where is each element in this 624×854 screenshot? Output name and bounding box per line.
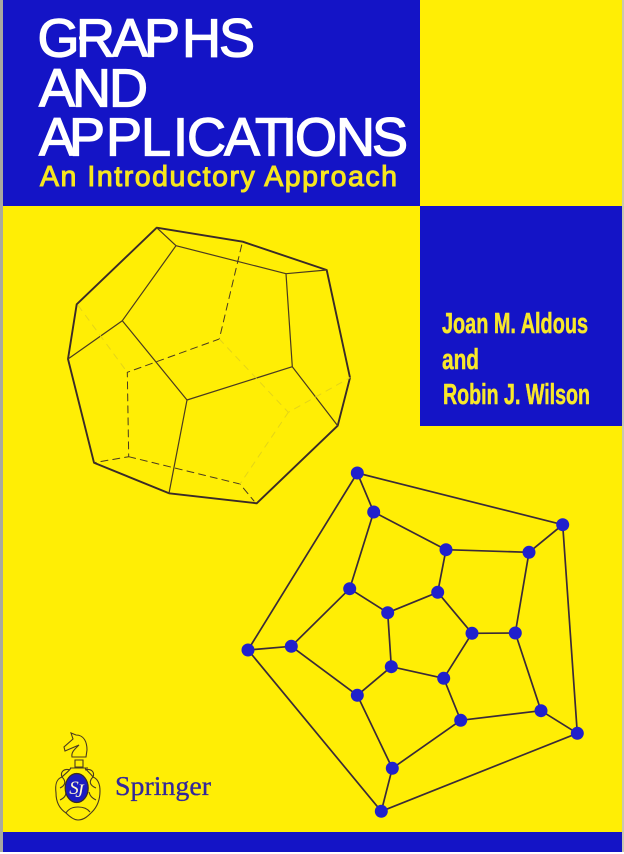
hidden edges <box>94 245 254 501</box>
planar graph <box>242 466 584 818</box>
graph vertices <box>242 466 584 818</box>
title: APPLICATIONS <box>39 108 408 168</box>
logo initials <box>69 778 85 802</box>
title: GRAPHS <box>38 8 255 68</box>
logo initials: J <box>75 781 85 802</box>
outer outline <box>68 228 350 503</box>
dodecahedron drawing <box>68 228 350 503</box>
subtitle: An Introductory Approach <box>40 161 397 193</box>
front edges <box>68 228 338 493</box>
panel: title block <box>3 0 420 206</box>
icon: Springer knight logo <box>56 733 100 820</box>
publisher name: Springer <box>115 771 211 801</box>
authors text: and <box>442 344 479 376</box>
authors text <box>442 308 590 411</box>
graph edges <box>248 473 577 811</box>
bottom bar <box>3 832 622 852</box>
title: AND <box>39 58 148 118</box>
panel: authors <box>420 206 622 426</box>
faint hidden edges <box>78 306 350 484</box>
logo initials: S <box>69 778 79 799</box>
title <box>38 8 408 168</box>
